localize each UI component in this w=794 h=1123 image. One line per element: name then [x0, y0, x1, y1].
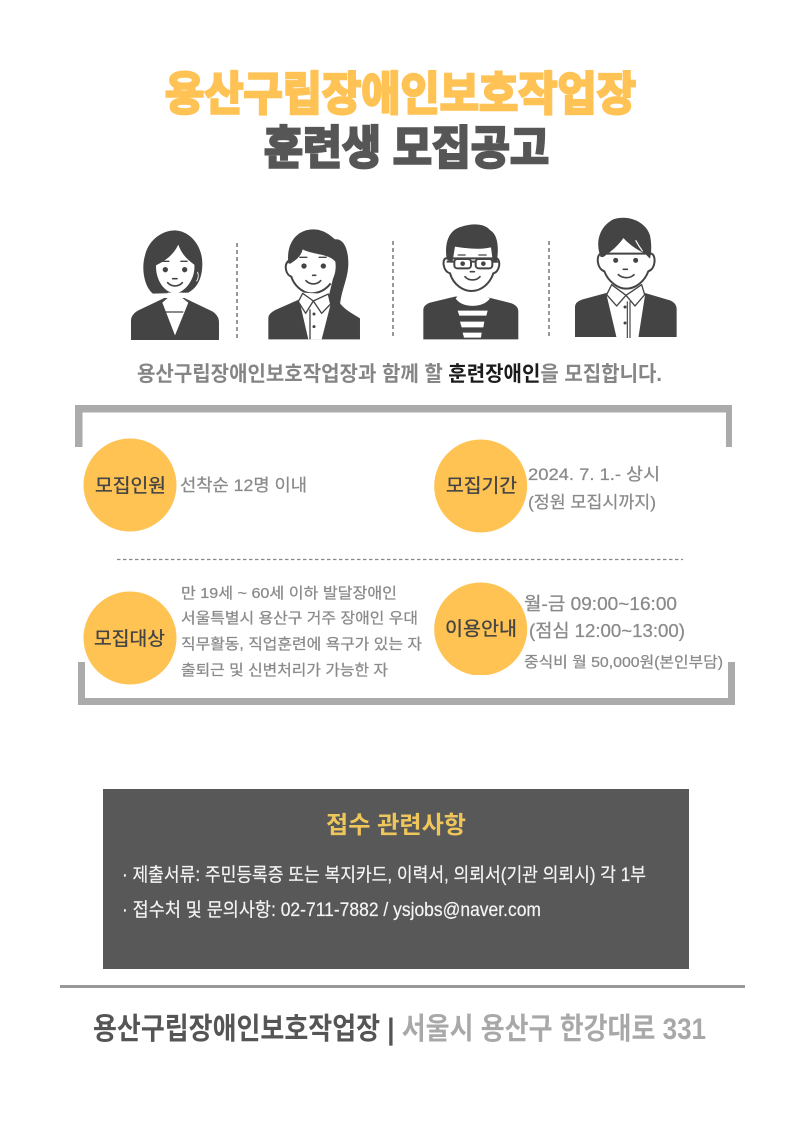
text: contact: · 접수처 및 문의사항: 02-711-7882 / ysjobs@naver.com: [122, 899, 541, 921]
item: recruitment period: (정원 모집시까지): [528, 493, 656, 512]
item: recruitment target: 만 19세 ~ 60세 이하 발달장애인: [181, 585, 397, 602]
item: usage information: (점심 12:00~13:00): [529, 621, 685, 641]
item: recruitment period: 2024. 7. 1.- 상시: [528, 465, 660, 484]
item: usage information: 월-금 09:00~16:00: [524, 594, 677, 614]
item: usage information: 이용안내: [445, 618, 517, 640]
item: usage information: 중식비 월 50,000원(본인부담): [524, 654, 723, 671]
item: recruitment number: 선착순 12명 이내: [180, 476, 307, 495]
item: recruitment target: [84, 585, 422, 684]
frame: bottom bracket: [78, 662, 735, 705]
item: recruitment target: 출퇴근 및 신변처리가 가능한 자: [181, 662, 388, 679]
icon: man with glasses and striped shirt: [423, 224, 518, 339]
icon: woman with ponytail: [268, 229, 360, 339]
title: organization name: 용산구립장애인보호작업장: [165, 68, 636, 120]
icon: man in suit: [575, 218, 677, 338]
item: recruitment period: 모집기간: [446, 475, 517, 497]
item: recruitment period: [434, 440, 660, 532]
item: recruitment target: 직무활동, 직업훈련에 욕구가 있는 자: [181, 636, 422, 653]
item: recruitment number: [84, 438, 307, 532]
frame: top bracket: [75, 405, 732, 447]
panel: application details: [103, 789, 689, 969]
item: recruitment target: 서울특별시 용산구 거주 장애인 우대: [181, 610, 418, 627]
item: recruitment number: 모집인원: [95, 475, 166, 497]
item: recruitment target: 모집대상: [94, 628, 165, 650]
title: recruitment notice: 훈련생 모집공고: [264, 122, 549, 174]
item: usage information: [434, 582, 723, 676]
icon: woman with short hair: [131, 230, 219, 340]
text: documents: · 제출서류: 주민등록증 또는 복지카드, 이력서, 의뢰서(기관 의뢰시) 각 1부: [122, 864, 646, 886]
subtitle: recruitment sentence: 용산구립장애인보호작업장과 함께 할 훈련장애인을 모집합니다.: [137, 363, 662, 386]
panel heading: 접수 관련사항: [326, 812, 466, 839]
footer: name and address: 용산구립장애인보호작업장 | 서울시 용산구 한강대로 331: [93, 1013, 706, 1046]
